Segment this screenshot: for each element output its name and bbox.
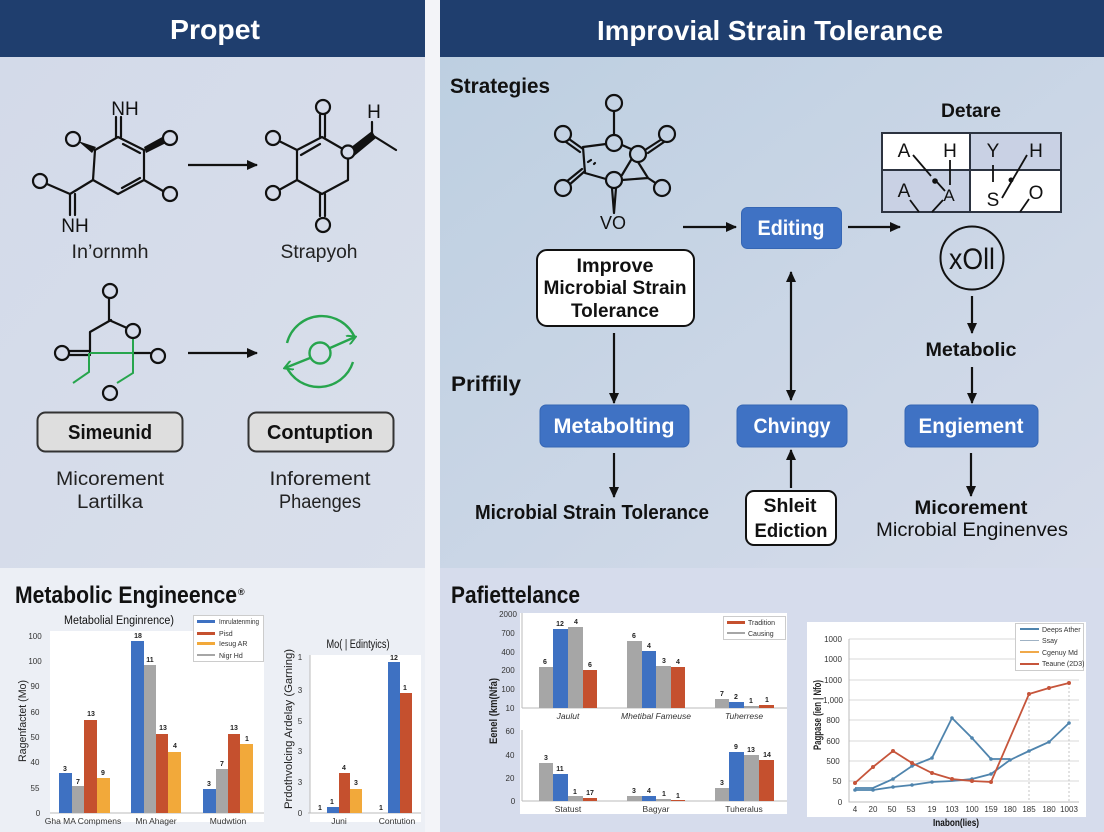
table: structure grid: A (943, 186, 955, 205)
bar charts: stacked pair: 14 (763, 752, 771, 759)
box: Editing: Editing (758, 217, 824, 240)
text: Micorement Lartilka: Micorement (56, 469, 165, 490)
heading: Pafiettelance: Pafiettelance (451, 582, 580, 609)
bar charts: stacked pair: 4 (647, 643, 651, 650)
icon: green cycle (285, 316, 355, 387)
bar chart: editing: 1 (403, 685, 407, 692)
circle: xOll (940, 226, 1004, 290)
bar chart: metabolic engineering: 7 (220, 761, 224, 768)
box: Editing (742, 208, 842, 248)
line chart: performance: 600 (826, 737, 840, 746)
molecule: Inornmh (33, 99, 177, 237)
table: structure grid: H (1029, 141, 1043, 162)
legend: metabolic chart (194, 616, 264, 662)
bar chart: editing: 1 (298, 653, 303, 662)
molecule: Strapyoh: H (367, 102, 381, 123)
bar charts: stacked pair: 3 (720, 780, 724, 787)
bar charts: stacked pair: Tuheralus (725, 804, 763, 814)
bar charts: stacked pair: 4 (647, 788, 651, 795)
box: Chvingy (737, 405, 847, 447)
legend: metabolic chart: Imrulatenming (219, 619, 259, 626)
bar charts: stacked pair: 6 (588, 662, 592, 669)
bar chart: metabolic engineering (17, 631, 264, 826)
table: structure grid: A (898, 141, 911, 162)
bar chart: editing: 3 (354, 780, 358, 787)
bar charts: stacked pair: 11 (556, 766, 564, 773)
legend: line chart: Deeps Ather (1042, 627, 1081, 634)
line chart: performance: 103 (945, 805, 959, 814)
line chart: performance: 800 (826, 716, 840, 725)
bar chart: metabolic engineering: Gha MA Compmens (45, 816, 121, 826)
arrow: Improve to Metabolting (613, 333, 615, 403)
line chart: performance: 4 (853, 805, 858, 814)
legend: line chart: Cgenuy Md (1042, 650, 1078, 657)
legend: metabolic chart: Iesug AR (219, 641, 247, 648)
bar charts: stacked pair: Mhetibal Fameuse (621, 711, 691, 721)
line chart: performance: 1000 (824, 676, 842, 685)
bar charts: stacked pair: 6 (543, 659, 547, 666)
bar chart: metabolic engineering: 90 (31, 682, 40, 691)
molecule: Inornmh: NH (61, 216, 89, 237)
bar chart: metabolic engineering: 11 (146, 657, 154, 664)
line chart: performance: 1003 (1060, 805, 1078, 814)
molecule: Inornmh: NH (111, 99, 139, 120)
panel: Improvial Strain Tolerance (440, 0, 1104, 568)
bar chart: editing: 12 (390, 655, 398, 662)
heading: Metabolic Engineence: Metabolic Engineence (15, 582, 237, 609)
text: Micorement Microbial Enginenves: Microbial Enginenves (876, 520, 1068, 541)
legend: line chart: Ssay (1042, 638, 1058, 645)
molecule: strategies (555, 95, 675, 233)
chart title: Metabolial Engirrence: Metabolial Enginrence) (64, 615, 174, 627)
bar charts: stacked pair: 3 (662, 658, 666, 665)
legend: bar charts: Tradition (748, 620, 775, 627)
bar chart: metabolic engineering: 100 (28, 657, 42, 666)
bar chart: editing: 5 (298, 717, 303, 726)
table: structure grid: S (987, 190, 999, 211)
button: Simeunid (38, 412, 182, 452)
mark: registered: ® (238, 587, 245, 597)
bar charts: stacked pair: 7 (720, 691, 724, 698)
arrow: Chvingy to Editing (790, 272, 792, 400)
bar charts: stacked pair: 13 (747, 747, 755, 754)
text: Microbial Strain Tolerance: Microbial Strain Tolerance (475, 502, 709, 524)
bar charts: stacked pair: 700 (501, 629, 515, 638)
bar chart: editing: 3 (298, 747, 303, 756)
arrow: structure to cycle (188, 352, 257, 354)
bar charts: stacked pair: 60 (506, 727, 515, 736)
bar charts: stacked pair: 12 (556, 621, 564, 628)
bar chart: metabolic engineering: 0 (36, 809, 41, 818)
legend: metabolic chart: Nigr Hd (219, 653, 243, 660)
bar chart: editing: 4 (342, 765, 346, 772)
bar chart: metabolic engineering: 3 (63, 766, 67, 773)
table: structure grid: O (1029, 183, 1043, 204)
bar charts: stacked pair: 0 (511, 797, 516, 806)
arrow: Metabolic to Engiement (971, 367, 973, 403)
label: Inornmh: In’ornmh (72, 242, 148, 263)
bar charts: stacked pair: 3 (632, 788, 636, 795)
bar charts: stacked pair: 1 (662, 791, 666, 798)
box: Shleit Ediction (746, 491, 836, 545)
bar chart: metabolic engineering: Mn Ahager (135, 816, 177, 826)
bar chart: editing: Juni (331, 816, 347, 826)
text: Inforement Phaenges (270, 469, 371, 513)
label: Strapyoh: Strapyoh (280, 242, 358, 263)
line chart: performance: 500 (826, 757, 840, 766)
bar chart: editing (283, 649, 421, 826)
arrow: Engiement down (970, 453, 972, 496)
heading: Priffily: Priffily (451, 373, 521, 396)
box: Engiement (905, 405, 1038, 447)
bar charts: stacked pair: 4 (676, 659, 680, 666)
line chart: performance: 1000 (824, 655, 842, 664)
legend: line chart (1016, 624, 1084, 670)
molecule: strategies: VO (600, 213, 626, 233)
bar charts: stacked pair: 4 (574, 619, 578, 626)
text: Metabolic: Metabolic (926, 340, 1017, 361)
arrow: molecule to Editing (683, 226, 736, 228)
bar chart: editing: Contution (379, 816, 415, 826)
line chart: performance: 53 (907, 805, 916, 814)
bar chart: metabolic engineering: 3 (207, 781, 211, 788)
line chart: performance: 20 (869, 805, 878, 814)
bar chart: metabolic engineering: 50 (31, 733, 40, 742)
bar charts: stacked pair: 40 (506, 751, 515, 760)
bar chart: metabolic engineering: 60 (31, 708, 40, 717)
box: Metabolting (540, 405, 689, 447)
header bar: Propet (0, 0, 425, 57)
line chart: performance (807, 622, 1086, 817)
header bar: Improvial Strain Tolerance: Improvial Strain Tolerance (597, 15, 943, 46)
line chart: performance: 1,000 (823, 696, 844, 705)
box: Engiement: Engiement (918, 415, 1024, 438)
bar charts: stacked pair: 6 (632, 633, 636, 640)
box: Shleit Ediction: Ediction (754, 521, 828, 542)
table: structure grid: A (898, 181, 911, 202)
bar charts: stacked pair: Statust (555, 804, 582, 814)
text: Micorement Microbial Enginenves: Micorement (914, 498, 1028, 519)
bar chart: editing: 3 (298, 778, 303, 787)
bar charts: stacked pair: Jaulut (556, 711, 580, 721)
line chart: performance: Pagpase (ien | Nfo) (812, 680, 824, 750)
bar chart: metabolic engineering: Mudwtion (210, 816, 246, 826)
bar chart: metabolic engineering: 9 (101, 770, 105, 777)
text: Micorement Microbial Enginenves (876, 498, 1068, 541)
line chart: performance: 19 (928, 805, 937, 814)
box: Improve Microbial Strain Tolerance (537, 250, 694, 326)
chart title: Mo Edintyics: Mo( | Edintyics) (326, 639, 390, 651)
bar chart: metabolic engineering: 13 (159, 725, 167, 732)
bar charts: stacked pair: 2000 (499, 610, 517, 619)
bar chart: editing: Prdothvolcing Ardelay (Garning) (283, 649, 295, 809)
header bar: Propet: Propet (170, 14, 260, 45)
text: Inforement Phaenges: Inforement (270, 469, 371, 490)
arrow: xOll to Metabolic (971, 296, 973, 333)
bar chart: metabolic engineering: 1 (245, 736, 249, 743)
bar charts: stacked pair: 10 (506, 704, 515, 713)
bar charts: stacked pair: 1 (676, 793, 680, 800)
table: structure grid: Y (987, 141, 1000, 162)
line chart: performance: 1000 (824, 635, 842, 644)
line chart: performance: 50 (888, 805, 897, 814)
bar charts: stacked pair: 20 (506, 774, 515, 783)
bar chart: metabolic engineering: 13 (87, 711, 95, 718)
bar charts: stacked pair: 1 (573, 789, 577, 796)
text: Micorement Lartilka (56, 469, 165, 513)
table: structure grid: H (943, 141, 957, 162)
bar charts: stacked pair: Tuherrese (725, 711, 763, 721)
box: Metabolting: Metabolting (554, 415, 674, 438)
bar charts: stacked pair: 9 (734, 744, 738, 751)
bar charts: stacked pair: 1 (749, 698, 753, 705)
line chart: performance: 180 (1003, 805, 1017, 814)
header bar: Improvial Strain Tolerance (440, 0, 1104, 57)
bar chart: metabolic engineering: 40 (31, 758, 40, 767)
bar chart: metabolic engineering: 55 (31, 784, 40, 793)
line chart: performance: 185 (1022, 805, 1036, 814)
bar chart: metabolic engineering: 7 (76, 779, 80, 786)
molecule: Strapyoh (266, 100, 396, 232)
table: structure grid (882, 133, 1061, 212)
panel: Propet (0, 0, 425, 568)
bar charts: stacked pair: Bagyar (643, 804, 670, 814)
bar chart: editing: 0 (298, 809, 303, 818)
bar chart: editing: 3 (298, 686, 303, 695)
bar charts: stacked pair: Eenel (km(Nfa) (488, 678, 500, 744)
circle: xOll: xOll (949, 243, 995, 276)
button: Contuption: Contuption (267, 422, 373, 444)
box: Improve Microbial Strain Tolerance: Tolerance (571, 301, 659, 322)
bar charts: stacked pair: 3 (544, 755, 548, 762)
bar charts: stacked pair: 200 (501, 666, 515, 675)
line chart: performance: 180 (1042, 805, 1056, 814)
heading: Detare: Detare (941, 101, 1001, 122)
legend: bar charts: Causing (748, 631, 774, 638)
legend: bar charts (724, 616, 786, 640)
bar chart: metabolic engineering: 13 (230, 725, 238, 732)
box: Improve Microbial Strain Tolerance: Microbial Strain (544, 278, 686, 299)
axis title: Inabon(lies): Inabon(lies) (933, 817, 979, 829)
legend: metabolic chart: Pisd (219, 631, 233, 638)
bar chart: editing: 1 (330, 799, 334, 806)
bar chart: metabolic engineering: 18 (134, 633, 142, 640)
arrow: Editing to table (848, 226, 900, 228)
panel: Pafiettelance (440, 568, 1104, 832)
bar chart: metabolic engineering: 4 (173, 743, 177, 750)
box: Improve Microbial Strain Tolerance: Improve (576, 256, 654, 277)
text: Micorement Lartilka: Lartilka (77, 492, 143, 513)
text: Inforement Phaenges: Phaenges (279, 492, 361, 513)
button: Contuption (248, 412, 394, 452)
bar chart: editing: 1 (318, 805, 322, 812)
molecule: lower structure (55, 284, 165, 400)
bar chart: editing: 1 (379, 805, 383, 812)
bar chart: metabolic engineering: Ragenfactet (Mo) (17, 680, 29, 762)
line chart: performance: 0 (838, 798, 843, 807)
line chart: performance: 100 (965, 805, 979, 814)
box: Chvingy: Chvingy (754, 415, 831, 438)
legend: line chart: Teaune (2D3) (1042, 661, 1084, 668)
arrow: Shleit up to Chvingy (790, 450, 792, 488)
bar charts: stacked pair: 400 (501, 648, 515, 657)
line chart: performance: 159 (984, 805, 998, 814)
panel: Metabolic Engineence (0, 568, 425, 832)
arrow: Metabolting down (613, 453, 615, 497)
bar charts: stacked pair: 17 (586, 790, 594, 797)
button: Simeunid: Simeunid (68, 422, 152, 444)
bar charts: stacked pair: 1 (765, 697, 769, 704)
bar charts: stacked pair: 100 (501, 685, 515, 694)
line chart: performance: 50 (833, 777, 842, 786)
bar charts: stacked pair (488, 610, 787, 814)
arrow: molecule to Strapyoh (188, 164, 257, 166)
bar charts: stacked pair: 2 (734, 694, 738, 701)
heading: Strategies: Strategies (450, 75, 550, 98)
bar chart: metabolic engineering: 100 (28, 632, 42, 641)
box: Shleit Ediction: Shleit (764, 496, 817, 517)
